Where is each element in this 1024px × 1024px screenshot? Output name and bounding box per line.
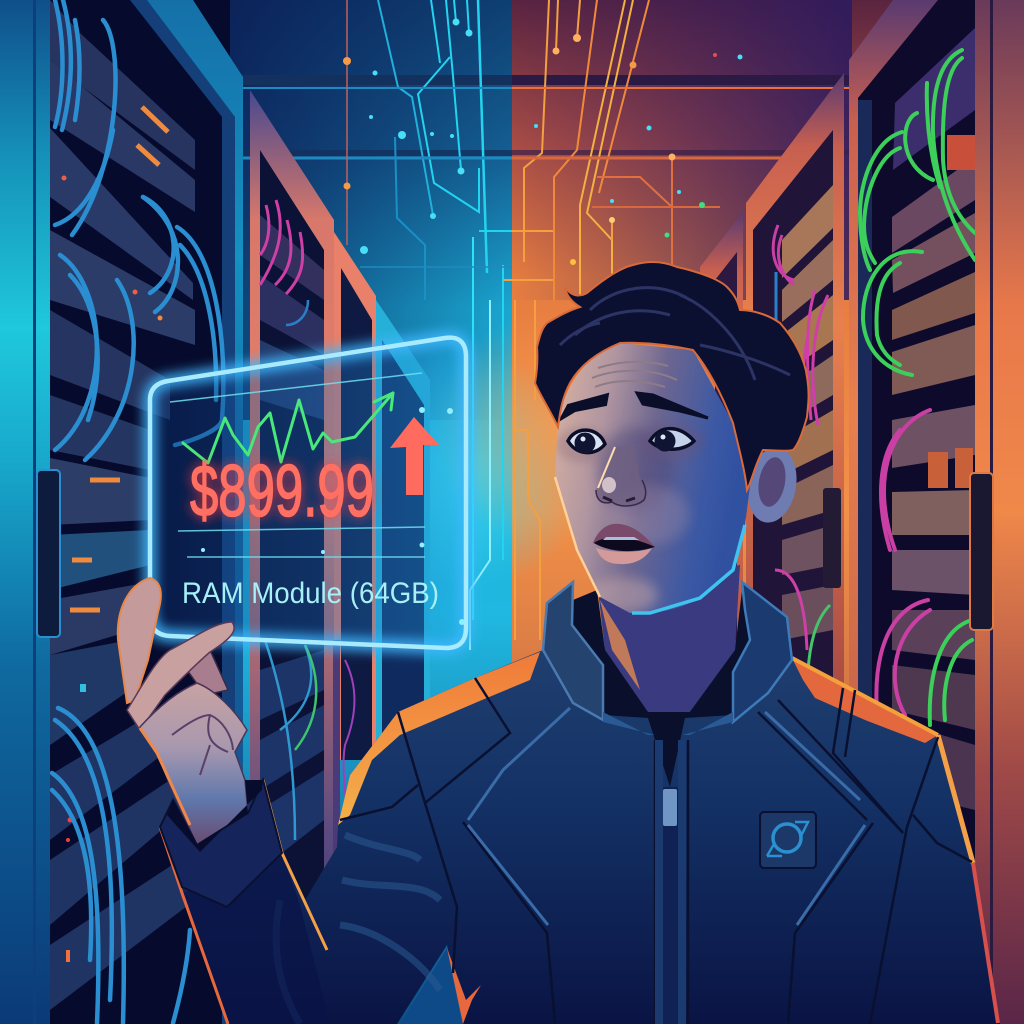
cheek rim light: [632, 525, 745, 613]
zipper: [663, 787, 678, 1024]
palm rim light: [140, 728, 190, 825]
eyebrows: [560, 394, 608, 420]
red up arrow: [390, 417, 439, 495]
zipper pull: [663, 789, 677, 826]
left server rack: [50, 0, 243, 1024]
right collar: [733, 582, 792, 722]
knuckle creases: [172, 715, 233, 775]
price glow: $899.99: [190, 451, 374, 532]
hair: [535, 262, 809, 490]
floating data particles: [343, 18, 742, 265]
pointing finger: [118, 578, 161, 703]
right server rack: [849, 0, 975, 1024]
arm folds: [276, 835, 440, 1024]
right shoulder rim light: [792, 658, 938, 743]
card glow: [150, 338, 466, 648]
forehead wrinkles: [592, 362, 677, 387]
hair highlights: [560, 288, 790, 380]
left outer frame: [0, 0, 60, 1024]
blue cables: [52, 0, 223, 1023]
open mouth: [593, 524, 655, 564]
armpit gap: [400, 948, 462, 1024]
door latch: left: [37, 470, 60, 637]
back finger: [187, 650, 228, 695]
chest badge: [760, 812, 816, 868]
forearm rim light: [160, 827, 228, 1024]
left collar: [543, 582, 603, 720]
eyes: [568, 429, 694, 454]
inner collar: [560, 590, 775, 787]
circuit traces: cyan side: [200, 0, 512, 650]
left mid racks: [250, 90, 430, 1024]
face shading: [556, 424, 704, 613]
status lights: [62, 107, 168, 962]
product label: RAM Module (64GB): [182, 577, 439, 610]
chart grid lines: [170, 373, 425, 557]
man: shocked technician: [118, 262, 1000, 1024]
door latch: right: [970, 473, 993, 630]
circuit traces: orange side: [347, 0, 850, 640]
server units: [892, 28, 975, 810]
card glass: [150, 338, 466, 648]
holographic price card: [150, 338, 466, 648]
magenta cables: [876, 410, 930, 760]
green cables: [860, 50, 975, 725]
nose: [596, 445, 646, 506]
sleeve cuff: [160, 780, 282, 907]
rising price line chart: [183, 393, 393, 463]
lit seam piping: [468, 708, 865, 925]
thumb: [127, 622, 234, 730]
forearm shade: [182, 853, 330, 1024]
neck: [598, 565, 740, 715]
jacket panel seams: [340, 678, 972, 1024]
server units: [50, 0, 195, 1010]
card particles: [201, 407, 465, 625]
raised hand: [118, 578, 282, 907]
fist and wrist: [140, 683, 248, 845]
face: [555, 343, 752, 613]
collar band: [603, 712, 733, 735]
ear: [742, 443, 802, 527]
card border: [150, 338, 466, 648]
right outer frame: [970, 0, 1024, 1024]
price: $899.99: [190, 451, 374, 532]
jacket torso and sleeves: [160, 640, 1000, 1024]
left shoulder rim light: [338, 652, 540, 825]
right mid racks: [700, 73, 844, 700]
